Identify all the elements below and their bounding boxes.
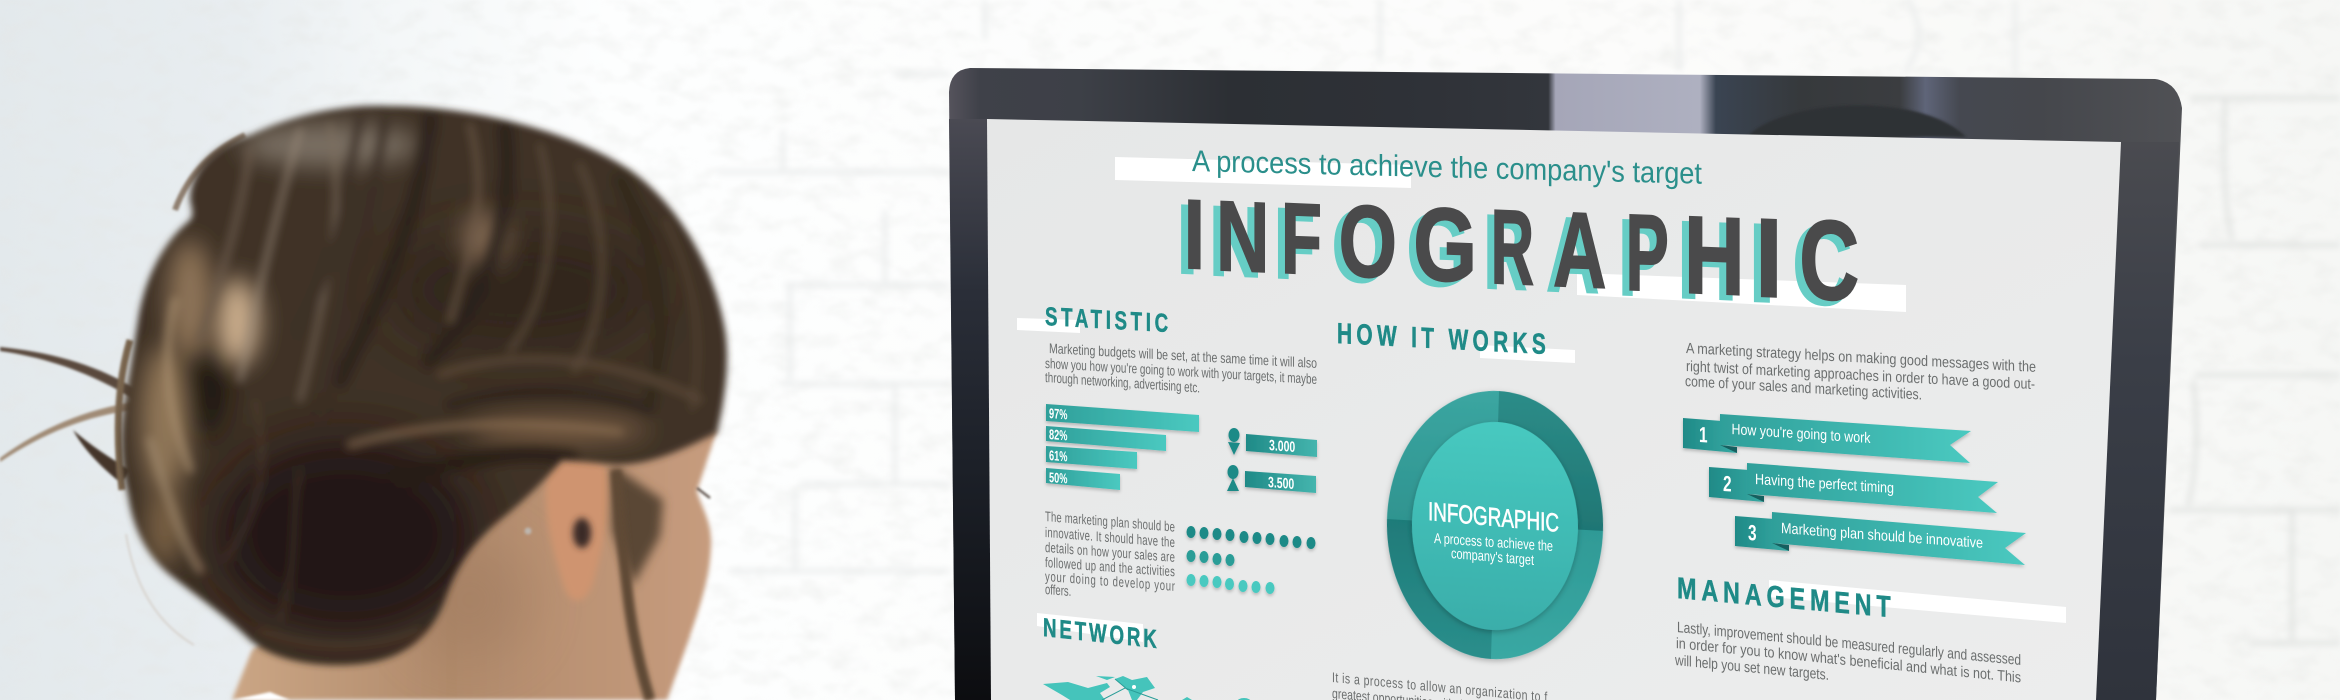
title: INFOGRAPHIC: [1176, 178, 1906, 330]
value bars: [1245, 434, 1317, 493]
ribbon 2: [1709, 463, 1998, 513]
panel: statistic: [1017, 301, 1317, 600]
management paragraph: will help you set new targets.: [1674, 652, 1829, 684]
hair: [100, 90, 740, 680]
title teal shadow: N: [1209, 184, 1262, 299]
strategy paragraph: come of your sales and marketing activities.: [1685, 373, 1922, 404]
panel: network: [1037, 612, 1251, 700]
subtitle bar and text: A process to achieve the company's target: [1192, 145, 1703, 191]
person seen from behind: [0, 90, 740, 700]
ribbon 3: 3: [1748, 521, 1757, 546]
title dark letters: C: [1799, 197, 1859, 325]
management heading: MANAGEMENT: [1677, 571, 1891, 624]
donut labels: A process to achieve the: [1434, 531, 1553, 555]
title dark letters: A: [1553, 190, 1606, 311]
title dark letters: H: [1684, 192, 1745, 319]
ribbon 2: Having the perfect timing: [1755, 471, 1894, 497]
title dark letters: R: [1491, 188, 1534, 308]
statistic paragraph: through networking, advertising etc.: [1045, 369, 1200, 396]
marketing plan paragraph: your doing to develop your: [1045, 568, 1175, 594]
ribbon 3: Marketing plan should be innovative: [1781, 520, 1983, 552]
panel: marketing strategy: [1683, 340, 2036, 565]
ribbon 1: 1: [1699, 423, 1708, 448]
title dark letters: F: [1281, 182, 1322, 297]
donut labels: [1428, 496, 1559, 569]
percentage labels: 61%: [1049, 447, 1068, 465]
network map: [1043, 676, 1251, 700]
percentage labels: 50%: [1049, 469, 1068, 487]
title dark letters: I: [1184, 178, 1205, 290]
title teal shadow: O: [1332, 188, 1390, 304]
flyaway strands: [0, 135, 245, 645]
title dark letters: [1184, 178, 1859, 325]
marketing plan paragraph: offers.: [1045, 581, 1071, 600]
network heading: NETWORK: [1043, 612, 1157, 654]
title teal shadow: [1176, 183, 1852, 330]
management heading: [1677, 571, 2066, 624]
statistic paragraph: Marketing budgets will be set, at the same time it will also: [1049, 340, 1317, 371]
donut centre: [1409, 417, 1581, 635]
management paragraph: in order for you to know what's beneficial and what is not. This: [1676, 635, 2021, 686]
marketing plan paragraph: followed up and the activities: [1045, 554, 1175, 580]
donut labels: INFOGRAPHIC: [1428, 496, 1559, 538]
title teal shadow: P: [1618, 197, 1662, 321]
sideburn and loose strand: [612, 465, 663, 700]
strategy paragraph: right twist of marketing approaches in order to have a good out-: [1686, 358, 2035, 393]
panel: how it works: [1332, 318, 1607, 700]
percentage bars: [1046, 404, 1199, 490]
dot rows: [1186, 526, 1316, 594]
icon: female person: [1228, 428, 1240, 455]
value labels: 3.500: [1268, 473, 1294, 493]
icon: male person: [1227, 465, 1239, 491]
title dark letters: P: [1626, 192, 1669, 316]
value labels: [1268, 436, 1295, 493]
donut chart: [1383, 385, 1607, 665]
marketing plan paragraph: details on how your sales are: [1045, 539, 1175, 565]
title teal shadow: C: [1792, 202, 1852, 330]
ribbon 2: 2: [1723, 472, 1732, 497]
value labels: 3.000: [1269, 436, 1295, 456]
marketing plan paragraph: innovative. It should have the: [1045, 524, 1175, 551]
title teal shadow: I: [1176, 183, 1198, 295]
panel: management: [1674, 571, 2066, 686]
marketing plan paragraph: The marketing plan should be: [1045, 508, 1175, 535]
strategy paragraph: A marketing strategy helps on making good messages with the: [1686, 340, 2036, 376]
donut segments: [1383, 385, 1607, 665]
strategy paragraph: [1685, 340, 2036, 404]
percentage labels: 97%: [1049, 405, 1068, 423]
marketing plan paragraph: [1045, 508, 1175, 600]
ribbon 1: How you're going to work: [1732, 421, 1871, 447]
percentage labels: [1049, 405, 1068, 487]
title dark letters: I: [1755, 195, 1783, 321]
ear: [524, 459, 609, 601]
statistic paragraph: show you how you're going to work with your targets, it maybe: [1045, 355, 1317, 387]
title teal shadow: R: [1484, 193, 1527, 313]
statistic paragraph: [1045, 340, 1317, 396]
title teal shadow: A: [1546, 195, 1599, 316]
management paragraph: Lastly, improvement should be measured regularly and assessed: [1677, 619, 2021, 669]
title bar: [1577, 273, 1906, 312]
ribbon 1: [1683, 414, 1971, 463]
title teal shadow: I: [1748, 200, 1776, 326]
monitor bezel: [949, 68, 2182, 700]
ribbon 3: [1735, 512, 2026, 565]
title dark letters: N: [1216, 179, 1269, 294]
title teal shadow: H: [1677, 197, 1738, 324]
percentage labels: 82%: [1049, 426, 1068, 444]
monitor screen with infographic: [987, 119, 2121, 700]
title dark letters: O: [1339, 183, 1397, 299]
title teal shadow: F: [1274, 187, 1315, 302]
title dark letters: G: [1413, 185, 1477, 304]
donut labels: company's target: [1451, 546, 1534, 569]
statistic heading: STATISTIC: [1045, 301, 1168, 338]
title teal shadow: G: [1406, 190, 1470, 309]
neck and face: [232, 430, 717, 700]
how it works heading: HOW IT WORKS: [1337, 318, 1546, 361]
